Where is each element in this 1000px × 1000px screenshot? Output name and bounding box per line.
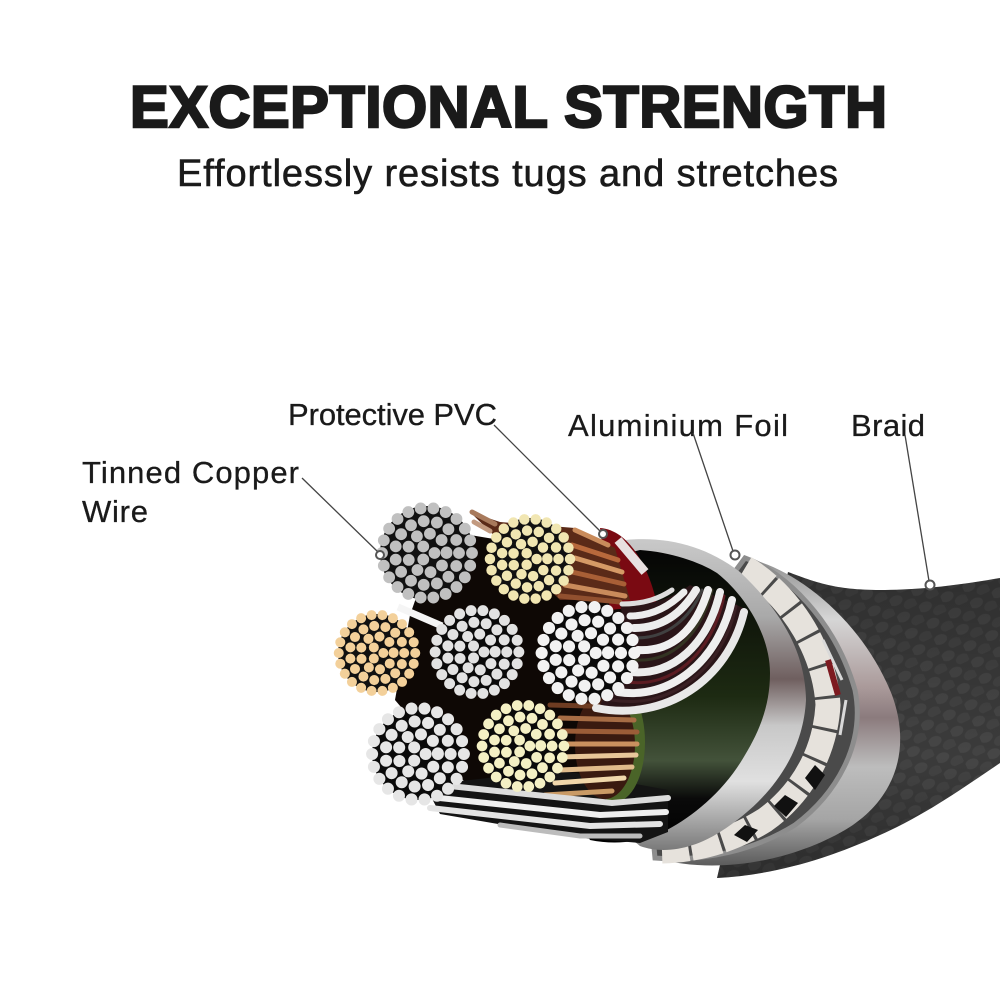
outer silver collar <box>640 558 900 865</box>
green wire insulation <box>585 682 645 802</box>
wire bundle: copper left <box>338 614 416 692</box>
label: aluminium foil: Aluminium Foil <box>568 408 788 443</box>
title: EXCEPTIONAL STRENGTH <box>130 75 887 140</box>
red wire insulation <box>600 528 657 610</box>
wire bundle: tinned center <box>435 610 519 694</box>
label: protective pvc <box>288 397 607 538</box>
wire bundle: copper top <box>489 518 571 600</box>
wire bundle: tinned bottom left <box>372 708 464 800</box>
wire bundle: tinned top left <box>380 506 474 600</box>
braid jacket <box>717 572 1000 878</box>
cable illustration <box>338 506 1000 878</box>
wire bundle: tinned right <box>541 606 635 700</box>
inner silver ring <box>560 539 806 850</box>
white insulation highlight <box>618 540 645 572</box>
dark core behind wires <box>395 530 640 800</box>
cable opening <box>520 550 770 843</box>
label: protective pvc: Protective PVC <box>288 397 497 432</box>
copper strands upper <box>470 512 630 602</box>
label: tinned copper wire <box>82 455 384 559</box>
label: braid: Braid <box>851 408 925 443</box>
aluminium foil blocks <box>662 568 846 851</box>
label: aluminium foil <box>568 408 788 560</box>
curved silver strands <box>596 585 748 715</box>
label: tinned copper wire: Wire <box>82 494 148 529</box>
dark gap under foil <box>640 558 857 859</box>
label: braid <box>851 408 934 590</box>
white strand highlight <box>398 607 442 626</box>
copper strands lower <box>545 691 637 799</box>
straight silver strands lower <box>430 785 668 836</box>
subtitle: Effortlessly resists tugs and stretches <box>177 153 838 195</box>
wire bundle: copper bottom <box>482 705 564 787</box>
label: tinned copper wire: Tinned Copper <box>82 455 299 490</box>
dark backing behind lower strands <box>425 770 668 843</box>
